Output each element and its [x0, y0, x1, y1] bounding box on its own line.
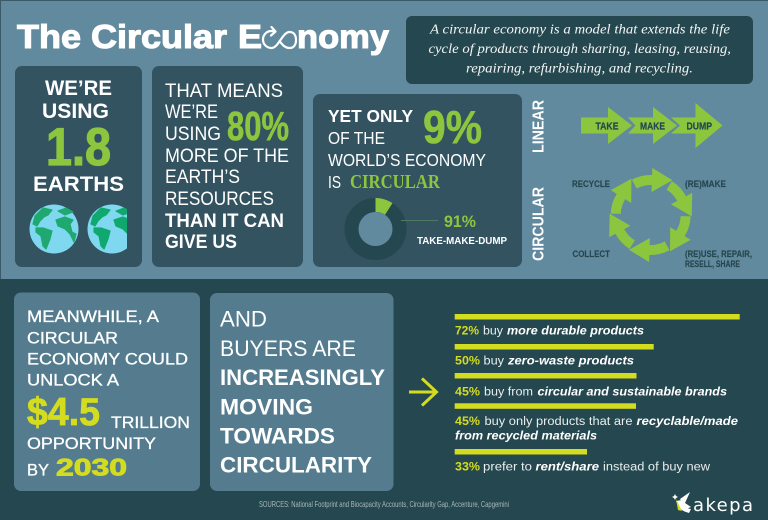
icon: earth two, cropped — [88, 204, 127, 254]
donut label: TAKE-MAKE-DUMP — [417, 236, 507, 247]
big number 9%: 9% — [423, 101, 482, 153]
panel: 9 percent: WORLD’S ECONOMY — [328, 150, 486, 170]
stat 50 percent: 50% — [455, 355, 480, 367]
panel: definition: cycle of products through sharing, leasing, reusing, — [428, 42, 731, 57]
panel: 4.5 trillion opportunity: UNLOCK A — [27, 371, 120, 390]
title: The Circular — [17, 19, 227, 56]
panel: 1.8 earths: USING — [42, 100, 109, 123]
icon: infinity recycling loop — [263, 27, 296, 48]
icon: bird mark — [672, 492, 691, 513]
stat 72 percent: more durable products — [507, 325, 644, 337]
stat 33 percent: rent/share — [536, 462, 600, 474]
linear arrows — [581, 103, 722, 148]
panel: 9 percent — [313, 94, 522, 267]
panel: buyers moving towards circularity: CIRCULARITY — [220, 453, 372, 478]
panel: 4.5 trillion opportunity: MEANWHILE, A — [27, 307, 160, 326]
stat 45 percent circular brands: 45% — [455, 387, 480, 399]
circular label: CIRCULAR — [530, 187, 548, 261]
panel: 80 percent: WE’RE — [165, 102, 218, 123]
panel: 1.8 earths — [15, 66, 142, 267]
arrow: take: TAKE — [596, 120, 618, 132]
bar chart: buyer stats — [455, 314, 740, 474]
circular stage labels: COLLECT — [572, 249, 610, 259]
panel: 4.5 trillion opportunity — [14, 292, 200, 491]
circular stage labels: RESELL, SHARE — [685, 259, 740, 269]
sources: SOURCES: National Footprint and Biocapacity Accounts, Circularity Gap, Accenture, Capgemini — [259, 499, 509, 509]
panel: buyers moving towards circularity: AND — [220, 307, 267, 332]
panel: 4.5 trillion opportunity: CIRCULAR — [27, 328, 118, 347]
stat 33 percent: instead of buy new — [603, 462, 711, 474]
icon: earth one — [30, 204, 78, 254]
top background — [0, 0, 768, 279]
panel: buyers moving towards circularity — [210, 293, 394, 491]
panel: 80 percent: THAN IT CAN — [165, 211, 284, 232]
stat 45 percent recyclable — [455, 403, 739, 442]
stat 50 percent: buy — [484, 355, 504, 367]
panel: 9 percent: CIRCULAR — [350, 171, 440, 193]
panel: 4.5 trillion opportunity: ECONOMY COULD — [27, 349, 188, 368]
stat 72 percent: buy — [483, 325, 503, 337]
stat 45 percent recyclable: from recycled materials — [455, 430, 597, 442]
bottom background — [0, 279, 768, 520]
panel: 4.5 trillion opportunity: TRILLION — [111, 413, 190, 432]
arrow: dump — [671, 103, 722, 148]
circular stage labels — [572, 179, 752, 269]
panel: 80 percent: THAT MEANS — [165, 81, 283, 102]
logo: akepa — [672, 492, 753, 516]
panel: 80 percent: EARTH’S — [165, 167, 240, 188]
panel: 80 percent: USING — [165, 124, 221, 145]
panel: 1.8 earths: EARTHS — [33, 173, 124, 196]
stat 45 percent recyclable: buy only products that are — [484, 416, 632, 428]
stat 45 percent circular brands — [455, 373, 727, 399]
donut label: 91% — [444, 212, 476, 231]
big number $4.5: $4.5 — [27, 391, 100, 434]
circular arrows — [601, 162, 701, 268]
stat 72 percent — [455, 314, 740, 337]
panel: definition: repairing, refurbishing, and recycling. — [466, 62, 693, 76]
arrow: make: MAKE — [640, 120, 665, 132]
title: E — [238, 19, 262, 56]
stat 72 percent: 72% — [455, 325, 479, 337]
panel: 4.5 trillion opportunity: OPPORTUNITY — [27, 434, 156, 453]
stat 33 percent: prefer to — [483, 462, 532, 474]
stat 45 percent circular brands: buy from — [484, 387, 533, 399]
arrow: to buyer stats — [409, 378, 436, 406]
panel: definition — [406, 16, 753, 84]
panel: buyers moving towards circularity: MOVING — [220, 394, 313, 419]
arrow: make — [628, 107, 677, 144]
panel: 4.5 trillion opportunity: BY — [27, 461, 49, 480]
donut label — [417, 212, 507, 247]
panel: 80 percent — [152, 66, 303, 267]
stat 50 percent: zero-waste products — [507, 355, 634, 367]
stat 45 percent recyclable: 45% — [455, 416, 480, 428]
linear label: LINEAR — [530, 100, 548, 153]
panel: 80 percent: MORE OF THE — [165, 146, 289, 167]
logo: akepa: akepa — [693, 495, 753, 516]
donut chart — [352, 198, 400, 253]
title: nomy — [297, 19, 389, 56]
stat 33 percent — [455, 449, 711, 474]
circular stage labels: RECYCLE — [572, 179, 610, 189]
stat 45 percent recyclable: recyclable/made — [636, 416, 739, 428]
panel: 1.8 earths: WE’RE — [45, 77, 112, 100]
panel: buyers moving towards circularity: INCREASINGLY — [220, 365, 385, 390]
title — [17, 19, 389, 56]
panel: 80 percent: RESOURCES — [165, 189, 274, 210]
arrow: dump: DUMP — [686, 120, 712, 132]
big number 2030: 2030 — [56, 455, 127, 482]
panel: buyers moving towards circularity: TOWARDS — [220, 423, 335, 448]
panel: 9 percent: YET ONLY — [328, 106, 413, 126]
stat 45 percent circular brands: circular and sustainable brands — [538, 387, 727, 399]
stat 33 percent: 33% — [455, 462, 480, 474]
panel: definition: A circular economy is a model that extends the life — [429, 22, 730, 38]
panel: buyers moving towards circularity: BUYERS ARE — [220, 336, 356, 361]
circular stage labels: (RE)MAKE — [685, 179, 726, 189]
panel: 9 percent: IS — [328, 172, 341, 192]
arrow: take — [581, 107, 632, 144]
panel: 80 percent: GIVE US — [165, 232, 237, 253]
big number 80%: 80% — [227, 103, 289, 149]
circular stage labels: (RE)USE, REPAIR, — [685, 249, 752, 259]
big number 1.8: 1.8 — [46, 118, 111, 177]
panel: 9 percent: OF THE — [328, 128, 385, 148]
stat 50 percent — [455, 344, 654, 367]
